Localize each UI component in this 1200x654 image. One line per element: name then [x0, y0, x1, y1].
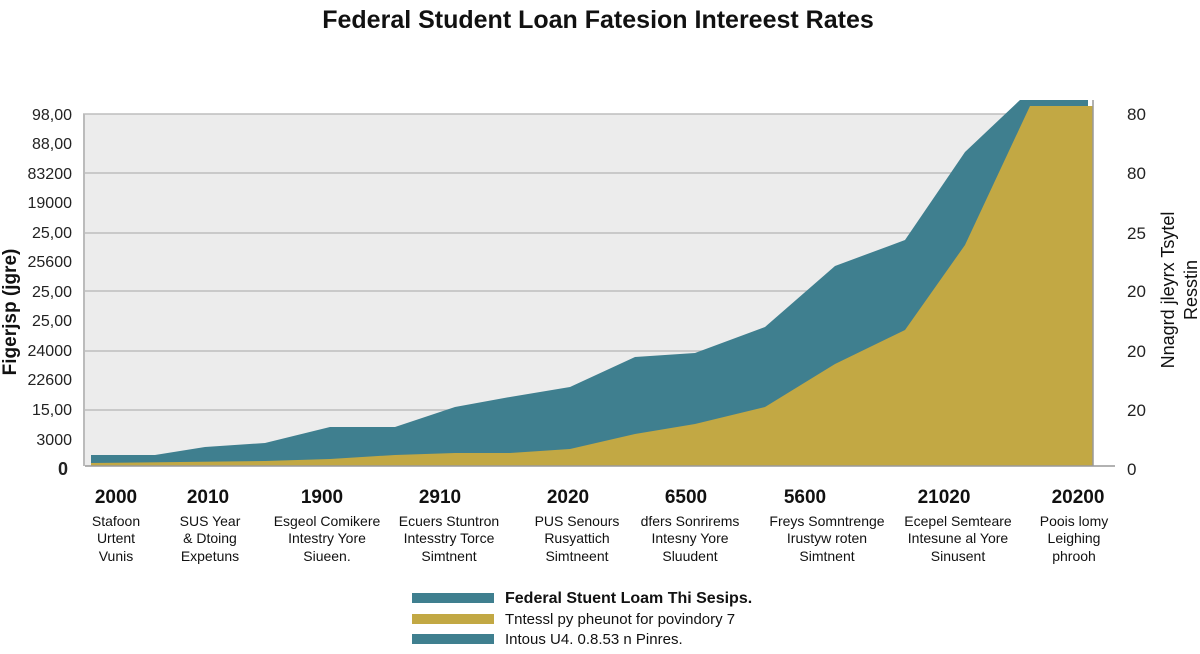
- x axis labels: 2000: [95, 487, 137, 508]
- area: teal series: [91, 100, 1088, 466]
- right axis labels: 20: [1127, 342, 1146, 361]
- x axis labels: Irustyw roten: [787, 530, 867, 546]
- x axis labels: phrooh: [1052, 548, 1096, 564]
- x axis labels: Leighing: [1048, 530, 1100, 546]
- right axis labels: 20: [1127, 282, 1146, 301]
- x axis labels: Simtnent: [799, 548, 855, 564]
- x axis labels: Esgeol Comikere: [274, 513, 381, 529]
- left axis labels: 24000: [28, 343, 72, 360]
- right axis labels: 80: [1127, 105, 1146, 124]
- right axis labels: 0: [1127, 460, 1136, 479]
- left axis labels: 25600: [28, 254, 72, 271]
- chart: area chart: [83, 100, 1115, 466]
- x axis labels: Sinusent: [931, 548, 985, 564]
- x axis labels: 20200: [1052, 487, 1104, 508]
- x axis labels: 2010: [187, 487, 229, 508]
- legend: [412, 590, 752, 648]
- x axis labels: Freys Somntrenge: [769, 513, 885, 529]
- x axis labels: Ecepel Semteare: [904, 513, 1012, 529]
- x axis labels: Intesune al Yore: [908, 530, 1008, 546]
- x axis labels: 2910: [419, 487, 461, 508]
- x axis labels: Simtneent: [545, 548, 609, 564]
- x axis labels: [92, 487, 1108, 564]
- right axis labels: 80: [1127, 164, 1146, 183]
- left axis labels: [28, 107, 72, 479]
- x axis labels: Poois lomy: [1040, 513, 1108, 529]
- legend: Tntessl py pheunot for povindory 7: [505, 611, 735, 628]
- right axis labels: 25: [1127, 224, 1146, 243]
- left axis title: Figerjsp (jgre): [0, 249, 21, 375]
- x axis labels: Intesstry Torce: [404, 530, 495, 546]
- left axis labels: 88,00: [32, 136, 72, 153]
- right axis labels: [1127, 105, 1146, 479]
- x axis labels: Ecuers Stuntron: [399, 513, 499, 529]
- left axis labels: 3000: [36, 432, 72, 449]
- left axis labels: 98,00: [32, 107, 72, 124]
- x axis labels: 21020: [918, 487, 970, 508]
- x axis labels: Simtnent: [421, 548, 477, 564]
- left axis labels: 19000: [28, 195, 72, 212]
- x axis labels: dfers Sonrirems: [641, 513, 739, 529]
- legend: Federal Stuent Loam Thi Sesips.: [505, 590, 752, 607]
- title: Federal Student Loan Fatesion Intereest Rates: [322, 6, 874, 34]
- left axis labels: 25,00: [32, 313, 72, 330]
- left axis labels: 25,00: [32, 225, 72, 242]
- x axis labels: 1900: [301, 487, 343, 508]
- x axis labels: Sluudent: [662, 548, 718, 564]
- x axis labels: Intestry Yore: [288, 530, 366, 546]
- x axis labels: Stafoon: [92, 513, 140, 529]
- left axis labels: 22600: [28, 372, 72, 389]
- right axis labels: 20: [1127, 401, 1146, 420]
- x axis labels: 6500: [665, 487, 707, 508]
- x axis labels: Urtent: [97, 530, 135, 546]
- x axis labels: 5600: [784, 487, 826, 508]
- x axis labels: & Dtoing: [183, 530, 237, 546]
- legend: Intous U4. 0.8.53 n Pinres.: [505, 631, 683, 648]
- x axis labels: Intesny Yore: [651, 530, 729, 546]
- x axis labels: SUS Year: [180, 513, 241, 529]
- left axis labels: 25,00: [32, 284, 72, 301]
- left axis labels: 83200: [28, 166, 72, 183]
- left axis labels: 15,00: [32, 402, 72, 419]
- x axis labels: Siueen.: [303, 548, 351, 564]
- x axis labels: Rusyattich: [544, 530, 610, 546]
- x axis labels: 2020: [547, 487, 589, 508]
- area: gold series: [91, 106, 1093, 466]
- right axis title: Nnagrd jleyrx Tsytel: [1158, 212, 1178, 368]
- left axis labels: 0: [58, 459, 68, 479]
- x axis labels: Vunis: [99, 548, 133, 564]
- x axis labels: Expetuns: [181, 548, 239, 564]
- x axis labels: PUS Senours: [535, 513, 619, 529]
